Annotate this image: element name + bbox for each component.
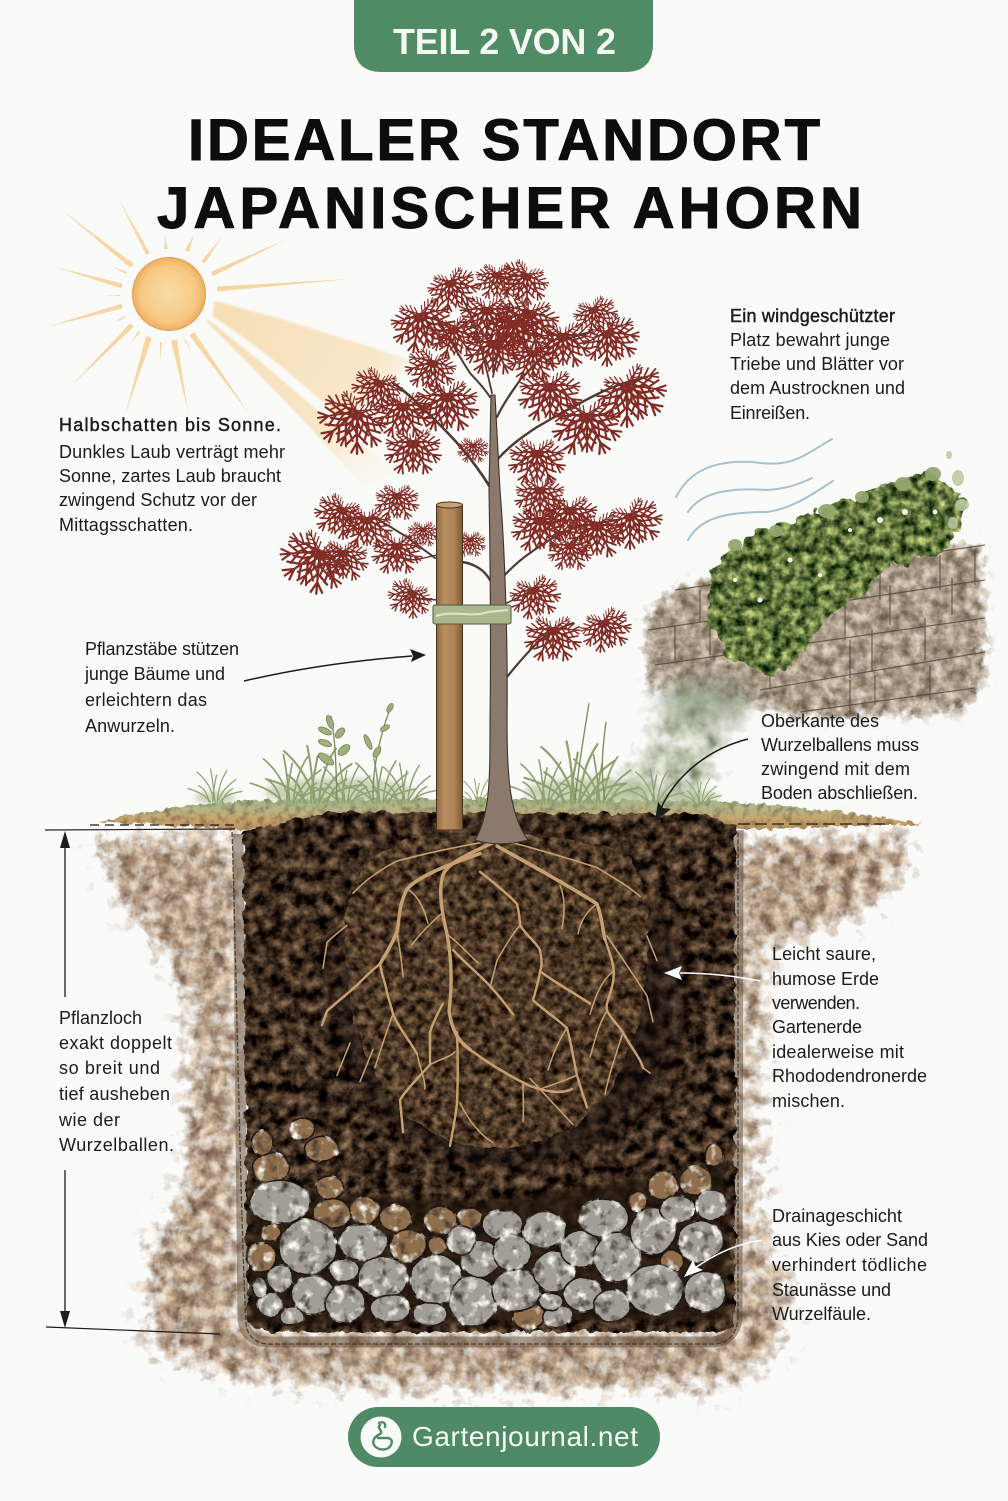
text: root ball top: zwingend mit dem [761, 759, 910, 779]
text: planting hole note: exakt doppelt [59, 1033, 172, 1053]
illustration: ground cross-section [45, 799, 925, 1392]
text: wind protection: Platz bewahrt junge [730, 330, 890, 350]
text: drainage note: Wurzelfäule. [772, 1304, 871, 1324]
text: wind protection: Ein windgeschützter [730, 306, 895, 326]
hedge foliage [707, 470, 967, 677]
text: sun exposure: zwingend Schutz vor der [59, 490, 257, 510]
text: wind protection: Einreißen. [730, 403, 810, 423]
dark pit edge band [238, 830, 738, 1342]
text: sun exposure: Halbschatten bis Sonne. [59, 415, 281, 435]
text: root ball top: Oberkante des [761, 711, 879, 731]
text: soil note: humose Erde [772, 969, 879, 989]
text: stake note: Pflanzstäbe stützen [85, 639, 239, 659]
foliage [265, 251, 680, 664]
mortar lines [648, 545, 985, 712]
arrow: to stake [244, 649, 426, 681]
text: stake note: Anwurzeln. [85, 716, 175, 736]
roots [322, 841, 657, 1146]
text: wind protection: Triebe und Blätter vor [730, 354, 904, 374]
planting soil [243, 812, 735, 1332]
soil ball [345, 835, 648, 1148]
text: sun exposure: Sonne, zartes Laub braucht [59, 466, 281, 486]
text: drainage note [772, 1206, 928, 1324]
text: sun exposure [59, 415, 285, 535]
grassy ground surface [98, 799, 925, 830]
hedge top leaves [728, 467, 941, 551]
header badge: TEIL 2 VON 2 [393, 21, 616, 62]
illustration: tree tie [433, 605, 511, 624]
icon: plant pot logo [360, 1416, 402, 1458]
trunk [475, 395, 528, 844]
footer badge [348, 1407, 660, 1467]
text: soil note: idealerweise mit [772, 1042, 904, 1062]
text: soil note: mischen. [772, 1091, 845, 1111]
footer badge: Gartenjournal.net [412, 1421, 638, 1452]
pit outline [232, 832, 738, 1344]
illustration: root ball [322, 835, 657, 1148]
arrow: to drainage [684, 1240, 762, 1277]
top edge clods left [90, 824, 238, 826]
branches [373, 300, 647, 677]
stones [248, 1118, 726, 1329]
title [157, 108, 862, 241]
text: planting hole note: wie der [58, 1110, 120, 1130]
title: JAPANISCHER AHORN [157, 176, 862, 241]
text: sun exposure: Dunkles Laub verträgt mehr [59, 442, 285, 462]
arrow: to root ball top [655, 739, 748, 821]
gaps between stones [250, 1159, 728, 1325]
text: wind protection [730, 306, 905, 423]
sun rays [47, 198, 350, 415]
leafy stalks [331, 703, 606, 800]
text: planting hole note: Pflanzloch [59, 1008, 142, 1028]
text: planting hole note: tief ausheben [59, 1084, 170, 1104]
hedge pale leaves [946, 451, 969, 529]
text: planting hole note: Wurzelballen. [59, 1135, 174, 1155]
illustration: wall with hedge [600, 451, 985, 812]
text: stake note: erleichtern das [85, 690, 207, 710]
text: soil note [772, 944, 927, 1111]
text: soil note: Leicht saure, [772, 944, 876, 964]
illustration: sun with rays and light beam [47, 198, 413, 488]
text: wind protection: dem Austrocknen und [730, 378, 905, 398]
stone wall [645, 543, 985, 718]
brown stones [248, 1118, 723, 1329]
undisturbed soil around pit [95, 836, 918, 1392]
title: IDEALER STANDORT [188, 108, 820, 173]
hedge highlights [733, 509, 938, 602]
text: soil note: Rhododendronerde [772, 1066, 927, 1086]
text: root ball top: Wurzelballens muss [761, 735, 919, 755]
shadow around root ball [335, 835, 685, 1165]
green haze below wall [600, 668, 768, 812]
text: drainage note: Drainageschicht [772, 1206, 902, 1226]
header badge [354, 0, 653, 72]
grass base haze [195, 778, 720, 806]
text: planting hole note [58, 1008, 174, 1155]
text: stake note: junge Bäume und [84, 664, 225, 684]
text: drainage note: verhindert tödliche [772, 1255, 927, 1275]
text: soil note: verwenden. [772, 993, 860, 1013]
text: drainage note: aus Kies oder Sand [772, 1230, 928, 1250]
text: drainage note: Staunässe und [772, 1280, 891, 1300]
dimension arrow: planting hole depth [46, 831, 220, 1334]
text: stake note [84, 639, 239, 736]
light beam [207, 301, 413, 488]
text: sun exposure: Mittagsschatten. [59, 515, 193, 535]
text: soil note: Gartenerde [772, 1017, 862, 1037]
grey stones [250, 1180, 726, 1327]
text: root ball top [761, 711, 919, 803]
illustration: gravel drainage layer [248, 1118, 728, 1329]
top edge clods right [738, 823, 885, 825]
dark wall shade [660, 672, 750, 724]
ground line left [45, 829, 235, 830]
icon: wind lines [676, 439, 833, 540]
illustration: grass tufts [188, 702, 722, 806]
text: root ball top: Boden abschließen. [761, 783, 918, 803]
illustration: maple tree [265, 251, 680, 844]
text: planting hole note: so breit und [59, 1058, 160, 1078]
illustration: support stake [436, 502, 462, 830]
sun disc [132, 257, 206, 331]
arrow: to soil [664, 966, 760, 981]
